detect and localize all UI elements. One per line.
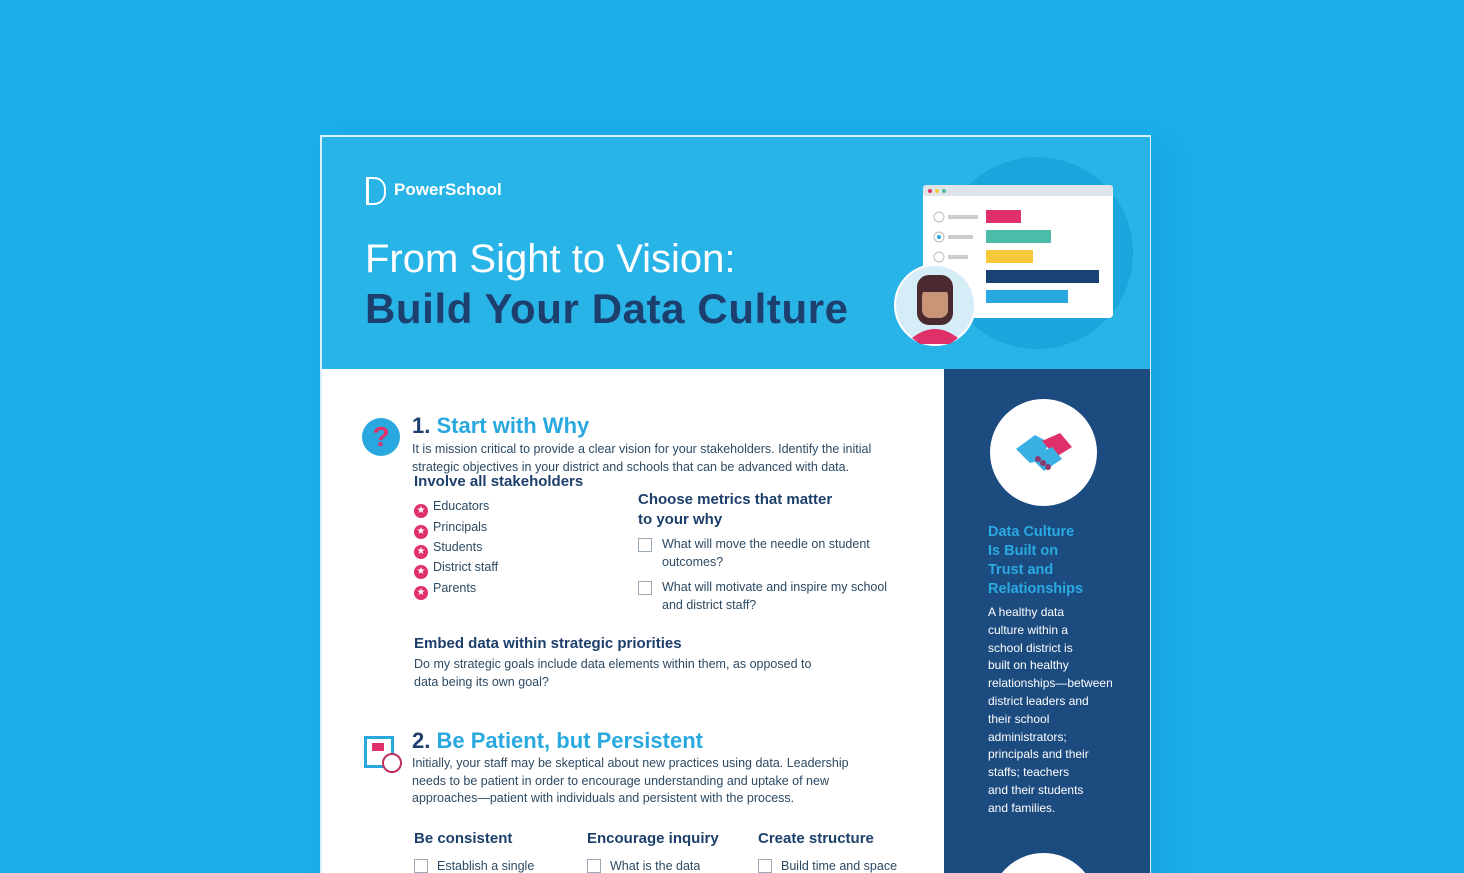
- columns: [414, 830, 897, 873]
- sidebar text: built on healthy: [988, 658, 1069, 672]
- title: From Sight to Vision:: [365, 237, 736, 281]
- sidebar text: school district is: [988, 641, 1073, 655]
- involve stakeholders: Principals: [433, 520, 487, 534]
- columns: Be consistent: [414, 830, 512, 847]
- sidebar text: and their students: [988, 783, 1083, 797]
- icon: question: ?: [372, 421, 390, 452]
- columns: Encourage inquiry: [587, 830, 719, 847]
- sidebar heading: [988, 524, 1083, 597]
- embed data: [414, 635, 811, 688]
- sidebar heading: Trust and: [988, 562, 1053, 578]
- columns: Establish a single: [437, 859, 534, 873]
- involve stakeholders: Parents: [433, 581, 476, 595]
- section 2: [412, 728, 849, 805]
- involve stakeholders: Educators: [433, 499, 489, 513]
- embed data: Embed data within strategic priorities: [414, 635, 682, 652]
- choose metrics: Choose metrics that matter: [638, 491, 832, 508]
- choose metrics: What will move the needle on student: [662, 537, 870, 551]
- involve stakeholders: ★: [417, 526, 425, 537]
- sidebar text: district leaders and: [988, 694, 1089, 708]
- columns: What is the data: [610, 859, 700, 873]
- icon: handshake: [990, 399, 1097, 506]
- sidebar text: staffs; teachers: [988, 765, 1069, 779]
- choose metrics: to your why: [638, 511, 722, 528]
- involve stakeholders: Students: [433, 540, 482, 554]
- involve stakeholders: ★: [417, 546, 425, 557]
- choose metrics: and district staff?: [662, 598, 756, 612]
- involve stakeholders: ★: [417, 587, 425, 598]
- section 2: Initially, your staff may be skeptical about new practices using data. Leadership: [412, 756, 849, 770]
- columns: Create structure: [758, 830, 874, 847]
- involve stakeholders: [414, 473, 583, 600]
- sidebar text: principals and their: [988, 747, 1089, 761]
- choose metrics: What will motivate and inspire my school: [662, 580, 887, 594]
- sidebar heading: Data Culture: [988, 524, 1074, 540]
- sidebar text: administrators;: [988, 730, 1067, 744]
- sidebar text: relationships—between: [988, 676, 1113, 690]
- involve stakeholders: Involve all stakeholders: [414, 473, 583, 490]
- logo: PowerSchool: [394, 180, 502, 199]
- sidebar text: culture within a: [988, 623, 1068, 637]
- involve stakeholders: ★: [417, 566, 425, 577]
- sidebar text: their school: [988, 712, 1049, 726]
- embed data: Do my strategic goals include data elements within them, as opposed to: [414, 657, 811, 671]
- logo: [366, 177, 502, 205]
- sidebar heading: Relationships: [988, 581, 1083, 597]
- next icon circle (cropped): [1002, 853, 1086, 873]
- title: [365, 237, 849, 332]
- sidebar heading: Is Built on: [988, 543, 1058, 559]
- section 1: 1. Start with Why: [412, 413, 589, 438]
- icon: question: [362, 418, 400, 456]
- icon: calendar clock: [364, 736, 402, 773]
- sidebar text: A healthy data: [988, 605, 1064, 619]
- choose metrics: [638, 491, 887, 612]
- sidebar: [944, 369, 1150, 873]
- columns: Build time and space: [781, 859, 897, 873]
- section 1: [412, 413, 871, 474]
- section 2: approaches—patient with individuals and persistent with the process.: [412, 791, 794, 805]
- sidebar text: and families.: [988, 801, 1055, 815]
- title: Build Your Data Culture: [365, 285, 849, 332]
- involve stakeholders: ★: [417, 505, 425, 516]
- choose metrics: outcomes?: [662, 554, 723, 568]
- header band: [322, 137, 1150, 369]
- involve stakeholders: District staff: [433, 560, 498, 574]
- section 2: needs to be patient in order to encourage understanding and uptake of new: [412, 774, 829, 788]
- embed data: data being its own goal?: [414, 674, 549, 688]
- card: [320, 135, 1151, 873]
- sidebar text: [988, 605, 1113, 815]
- section 2: 2. Be Patient, but Persistent: [412, 728, 703, 753]
- section 1: It is mission critical to provide a clear vision for your stakeholders. Identify the initial strategic objectives in your district and schools that can be advanced with data.: [412, 442, 871, 474]
- illustration: dashboard with avatar: [894, 157, 1133, 349]
